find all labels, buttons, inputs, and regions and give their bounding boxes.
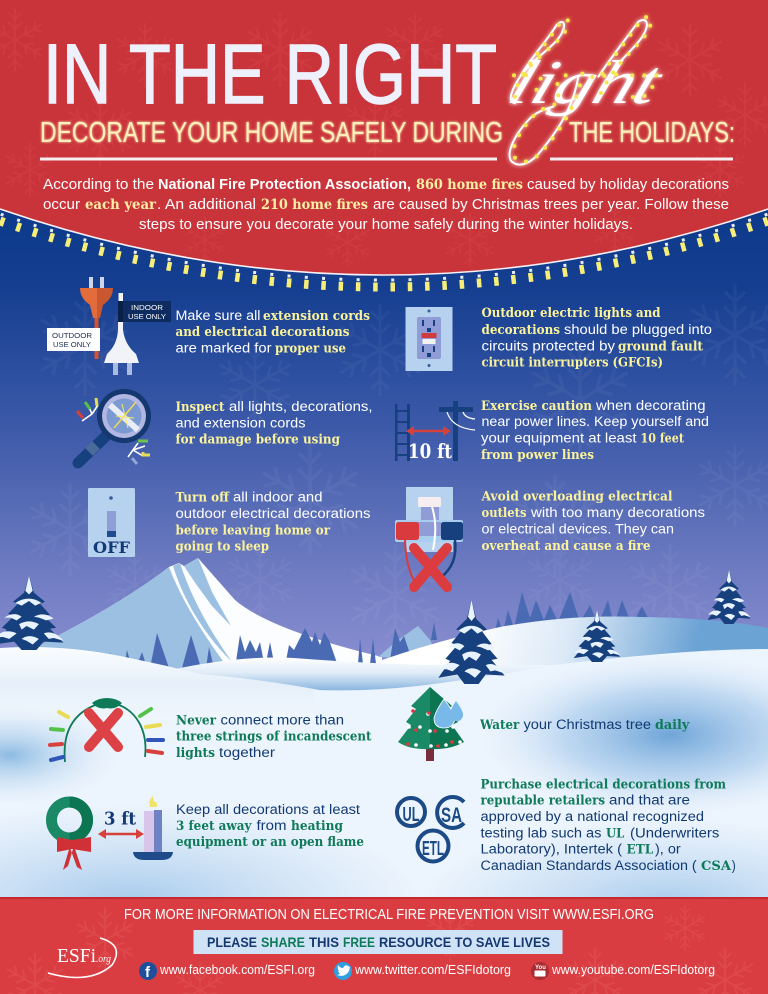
text: 3 feet away: equipment or an open flame <box>176 835 364 850</box>
share banner <box>194 930 562 954</box>
logo: ESFi: .org <box>96 954 111 965</box>
intro paragraph: caused by holiday decorations <box>527 176 729 193</box>
share banner: RESOURCE TO SAVE LIVES <box>379 934 550 950</box>
text: power lines: your equipment at least <box>481 430 637 446</box>
icon: tree with water drops <box>398 687 464 761</box>
label: indoor use only: USE ONLY <box>128 312 166 321</box>
text: inspect: and extension cords <box>176 416 306 430</box>
text: power lines: near power lines. Keep yourself and <box>482 414 709 429</box>
label: indoor use only: INDOOR <box>131 303 164 312</box>
icon: GFCI outlet <box>406 307 452 371</box>
text: power lines <box>481 398 709 463</box>
text: proper use: extension cords <box>263 309 370 324</box>
snow ground base <box>0 680 768 900</box>
text: turn off: Turn off <box>176 490 230 506</box>
subtitle: DECORATE YOUR HOME SAFELY DURING <box>40 117 503 149</box>
icon: overloaded outlet <box>395 487 463 588</box>
logo: ESFi <box>48 938 116 978</box>
icon: magnifying glass over lights <box>77 389 151 464</box>
text: 3 feet away: from <box>256 818 286 833</box>
text: reputable retailers: UL <box>606 826 624 841</box>
text: overloading: outlets <box>482 506 526 521</box>
text: reputable retailers: ) <box>732 858 736 873</box>
text: GFCI: Outdoor electric lights and <box>482 306 660 321</box>
text: power lines: Exercise caution <box>481 399 593 414</box>
text: reputable retailers: Canadian Standards Association ( <box>480 858 697 873</box>
front left snow hill <box>0 647 330 720</box>
text: turn off: all indoor and <box>233 490 322 504</box>
social: facebook: www.facebook.com/ESFI.org <box>159 962 315 977</box>
intro paragraph: 210 home fires <box>261 197 368 213</box>
icon: wreath and candle 3 ft <box>52 796 173 870</box>
text: never connect <box>176 712 372 761</box>
distant pine trees <box>108 592 654 668</box>
text: turn off <box>176 490 371 554</box>
script word: light <box>500 17 674 165</box>
text: inspect: all lights, decorations, <box>229 399 372 414</box>
label: outdoor use only: USE ONLY <box>53 340 91 349</box>
footer headline: FOR MORE INFORMATION ON ELECTRICAL FIRE PREVENTION VISIT WWW.ESFI.ORG <box>124 907 654 923</box>
icon: testing lab logos: SA <box>441 804 462 827</box>
text: water tree: daily <box>655 718 690 733</box>
text: reputable retailers: ), or <box>655 842 681 857</box>
text: never connect: connect more than <box>220 712 344 727</box>
label: indoor use only <box>118 301 171 322</box>
text: GFCI: circuit interrupters (GFCIs) <box>482 356 663 370</box>
share banner: THIS <box>309 934 339 950</box>
text: GFCI: decorations <box>482 323 560 338</box>
text: reputable retailers: approved by a national recognized <box>480 809 704 824</box>
script word: light: light <box>500 48 674 117</box>
text: water tree: your Christmas tree <box>524 717 651 732</box>
text: power lines: from power lines <box>481 448 594 463</box>
icon: ladder and power pole 10 ft <box>395 401 475 463</box>
text: GFCI: circuits protected by <box>482 338 615 354</box>
text: GFCI: ground fault <box>618 340 703 354</box>
text: never connect: three strings of incandescent <box>176 730 372 745</box>
snowy pine trees <box>0 570 750 684</box>
title: IN THE RIGHT <box>43 27 497 121</box>
text: proper use: proper use <box>275 342 346 356</box>
text: reputable retailers: testing lab such as <box>480 825 602 840</box>
footer snowflakes <box>4 905 756 994</box>
header snowflakes <box>0 8 768 268</box>
label: outdoor use only: OUTDOOR <box>52 331 93 340</box>
middle snow hill <box>170 658 570 692</box>
text: inspect: for damage before using <box>176 432 340 448</box>
text: 3 feet away: heating <box>291 819 343 834</box>
label: outdoor use only <box>47 328 100 351</box>
footer panel <box>0 897 768 994</box>
intro paragraph: are caused by Christmas trees per year. Follow these <box>373 196 729 213</box>
intro paragraph: occur <box>43 196 80 213</box>
text: water tree <box>479 717 690 733</box>
text: reputable retailers: Purchase electrical decorations from <box>480 777 726 792</box>
text: power lines: 10 feet <box>640 432 684 446</box>
social: youtube: You <box>535 965 546 971</box>
intro paragraph <box>43 176 729 233</box>
front right snow hill <box>314 649 768 800</box>
icon: string of lights crossed out <box>50 698 163 762</box>
logo: ESFi: ESFi <box>57 945 96 967</box>
text: overloading: overheat and cause a fire <box>482 539 650 554</box>
text: reputable retailers: reputable retailers <box>480 793 605 808</box>
icon: testing lab logos: ETL <box>422 838 444 860</box>
snow shadows <box>0 655 768 994</box>
text: overloading <box>481 490 705 554</box>
text: 3 feet away <box>176 802 364 850</box>
intro paragraph: 860 home fires <box>416 177 523 193</box>
social: youtube: www.youtube.com/ESFIdotorg <box>551 962 715 977</box>
text: proper use: Make sure all <box>176 308 260 323</box>
string of lights along the header <box>0 209 768 287</box>
background: night sky <box>0 190 768 670</box>
text: GFCI: should be plugged into <box>564 322 712 337</box>
social: facebook <box>139 962 315 981</box>
text: never connect: Never <box>176 713 216 728</box>
text: water tree: Water <box>479 718 519 733</box>
share banner: SHARE <box>261 934 305 950</box>
text: never connect: together <box>219 745 276 760</box>
intro paragraph: National Fire Protection Association, <box>158 176 411 193</box>
share banner: PLEASE <box>207 934 257 950</box>
header panel <box>0 0 768 275</box>
icon: ladder and power pole 10 ft: 10 ft <box>408 439 453 463</box>
text: inspect: Inspect <box>176 400 224 415</box>
text: overloading: Avoid overloading electrical <box>481 490 673 504</box>
intro paragraph: According to the <box>43 176 154 193</box>
text: reputable retailers: Laboratory), Intertek ( <box>480 842 623 857</box>
icon: wreath and candle 3 ft: 3 ft <box>104 808 137 830</box>
background: sky snowflakes <box>25 284 768 646</box>
icon: testing lab logos <box>397 797 464 862</box>
text: proper use: and electrical decorations <box>176 325 350 340</box>
intro paragraph: . An additional <box>157 196 256 213</box>
text: overloading: or electrical devices. They can <box>482 522 674 536</box>
back right snow hill <box>382 616 768 720</box>
text: GFCI <box>482 306 712 370</box>
text: inspect <box>176 399 372 448</box>
share banner: FREE <box>343 934 375 950</box>
social: twitter: www.twitter.com/ESFIdotorg <box>354 962 511 977</box>
intro paragraph: each year <box>85 197 157 213</box>
text: overloading: with too many decorations <box>530 505 705 520</box>
text: reputable retailers: CSA <box>701 859 732 874</box>
text: reputable retailers: (Underwriters <box>630 825 720 840</box>
text: reputable retailers: ETL <box>626 843 653 858</box>
intro paragraph: steps to ensure you decorate your home safely during the winter holidays. <box>139 216 633 233</box>
mountain <box>30 558 440 672</box>
text: 3 feet away: Keep all decorations at least <box>176 802 360 817</box>
subtitle rules <box>40 158 733 160</box>
text: 3 feet away: 3 feet away <box>176 819 252 834</box>
text: proper use <box>176 308 370 356</box>
social: facebook: f <box>145 964 151 981</box>
text: turn off: going to sleep <box>176 540 269 554</box>
text: proper use: are marked for <box>176 340 272 356</box>
icon: plugs with labels <box>47 277 171 375</box>
text: reputable retailers: and that are <box>609 792 690 807</box>
icon: light switch off <box>88 488 135 557</box>
text: reputable retailers <box>480 777 736 874</box>
text: never connect: lights <box>176 746 215 761</box>
text: turn off: outdoor electrical decorations <box>176 506 371 521</box>
text: turn off: before leaving home or <box>176 524 330 538</box>
icon: light switch off: OFF <box>93 538 131 557</box>
icon: testing lab logos: UL <box>402 804 420 826</box>
text: power lines: when decorating <box>595 398 706 413</box>
